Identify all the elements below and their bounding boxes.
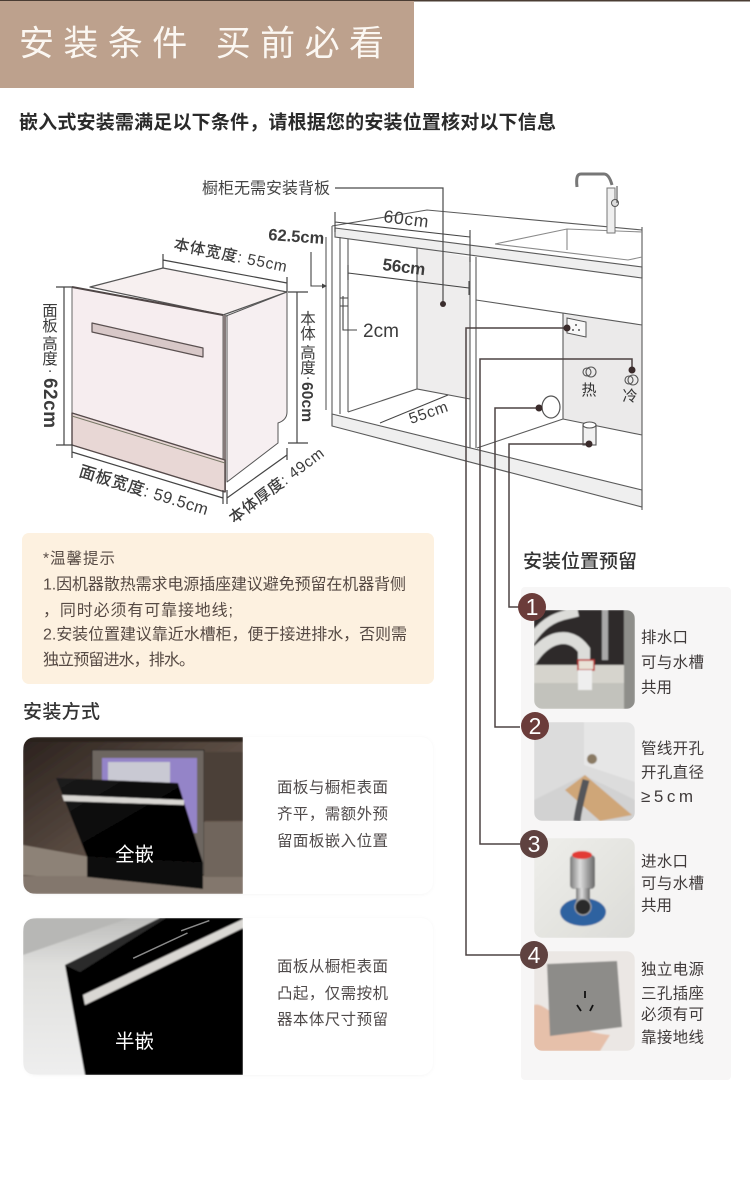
text: power socket: 独立电源 — [641, 960, 704, 978]
photo: water inlet valve — [534, 838, 635, 938]
reminder text: 独立预留进水，排水。 — [43, 651, 195, 669]
text: drain outlet: 可与水槽 — [641, 654, 704, 672]
cold valve: 冷 — [622, 388, 638, 405]
photo: wall socket in hand — [534, 951, 635, 1051]
photo: drain outlet — [530, 610, 635, 709]
dishwasher body — [72, 268, 287, 492]
badge 4 — [520, 941, 548, 969]
label: 60cm: 60cm — [383, 206, 430, 231]
text: drain outlet: 排水口 — [641, 628, 688, 646]
label: 2cm: 2cm — [363, 321, 399, 342]
callout: no back panel needed — [202, 180, 446, 307]
description: semi embed — [277, 958, 388, 1028]
panel: reserved positions — [521, 587, 731, 1080]
label: body depth: 本体厚度: 49cm — [226, 444, 327, 527]
label: panel height: : — [48, 359, 52, 376]
dishwasher dimension diagram — [39, 234, 327, 527]
label: body width: 本体宽度: 55cm — [172, 234, 289, 276]
dimension lines — [56, 254, 308, 504]
cold valve — [622, 375, 638, 405]
text: pipe opening: ≥5cm — [641, 787, 693, 806]
label: body height — [298, 310, 316, 422]
label: panel width: 面板宽度: 59.5cm — [77, 461, 211, 519]
label: semi embed: 半嵌 — [115, 1031, 154, 1053]
reminder text: *温馨提示 — [43, 550, 115, 568]
text: power socket — [641, 960, 704, 1046]
reminder text: 2.安装位置建议靠近水槽柜，便于接进排水，否则需 — [43, 626, 407, 644]
text: pipe opening — [641, 740, 704, 806]
badge 2: 2 — [529, 713, 541, 739]
leader lines from diagram to badges — [466, 324, 636, 955]
callout: no back panel needed: 橱柜无需安装背板 — [202, 180, 330, 198]
label: body height: 度 — [300, 359, 316, 377]
badge 3 — [520, 830, 548, 858]
text: power socket: 靠接地线 — [641, 1028, 704, 1046]
text: water inlet: 进水口 — [641, 852, 688, 870]
card: semi embed — [23, 918, 388, 1075]
reminder box — [22, 533, 434, 684]
badge 2 — [521, 712, 549, 740]
label: 62.5cm with arrow — [268, 226, 327, 288]
drain pipe — [583, 422, 596, 445]
description: full embed: 留面板嵌入位置 — [277, 832, 388, 850]
title banner: 安装条件 买前必看 — [19, 24, 384, 64]
cabinet diagram — [202, 174, 642, 510]
photo: full embed dishwasher — [23, 737, 243, 894]
cabinet structure — [326, 210, 642, 510]
description: semi embed: 面板从橱柜表面 — [277, 958, 388, 976]
description: full embed — [277, 778, 388, 850]
badge 3: 3 — [528, 831, 540, 857]
text: power socket: 必须有可 — [641, 1006, 704, 1024]
label: body height: 体 — [300, 325, 316, 343]
label: 56cm: 56cm — [382, 255, 427, 279]
label: 55cm: 55cm — [407, 399, 450, 428]
label: body height: 本 — [300, 310, 316, 328]
reminder text: ，同时必须有可靠接地线; — [43, 602, 233, 620]
description: full embed: 面板与橱柜表面 — [277, 778, 388, 796]
badge 1 — [518, 593, 546, 621]
pipe hole — [542, 396, 560, 418]
badge 4: 4 — [528, 942, 541, 968]
photo: pipe opening — [534, 722, 635, 821]
text: water inlet: 共用 — [641, 896, 672, 914]
hot valve: 热 — [581, 382, 597, 399]
intro sentence: 嵌入式安装需满足以下条件，请根据您的安装位置核对以下信息 — [19, 110, 556, 134]
text: water inlet: 可与水槽 — [641, 874, 704, 892]
label: full embed: 全嵌 — [115, 844, 154, 866]
description: full embed: 齐平，需额外预 — [277, 805, 388, 823]
badge 1: 1 — [526, 594, 538, 620]
label: body height: : — [306, 366, 310, 383]
text: pipe opening: 开孔直径 — [641, 764, 704, 782]
text: power socket: 三孔插座 — [641, 984, 704, 1002]
title banner — [0, 0, 750, 88]
description: semi embed: 器本体尺寸预留 — [277, 1010, 388, 1028]
card: full embed — [23, 737, 388, 894]
heading: install method: 安装方式 — [23, 700, 100, 723]
label: body height: 高 — [300, 344, 316, 362]
label: panel height: 62cm — [39, 378, 60, 428]
text: drain outlet — [641, 628, 704, 696]
label: body height: 60cm — [298, 382, 315, 422]
faucet — [577, 174, 618, 233]
label: panel height — [39, 303, 60, 428]
reminder text — [43, 550, 407, 669]
text: pipe opening: 管线开孔 — [641, 740, 704, 758]
heading: reserved positions: 安装位置预留 — [523, 550, 637, 572]
label: panel height: 度 — [42, 350, 58, 368]
label: panel height: 高 — [42, 335, 58, 353]
label: 62.5cm with arrow: 62.5cm — [268, 226, 325, 248]
label: panel height: 面 — [42, 303, 58, 320]
photo: semi embed dishwasher — [23, 918, 243, 1075]
description: semi embed: 凸起，仅需按机 — [277, 984, 388, 1002]
reminder text: 1.因机器散热需求电源插座建议避免预留在机器背侧 — [43, 576, 406, 594]
text: drain outlet: 共用 — [641, 678, 672, 696]
label: panel height: 板 — [42, 317, 58, 335]
wall socket — [567, 318, 586, 337]
dimension lines — [335, 212, 470, 423]
text: water inlet — [641, 852, 704, 914]
hot valve — [581, 367, 597, 399]
